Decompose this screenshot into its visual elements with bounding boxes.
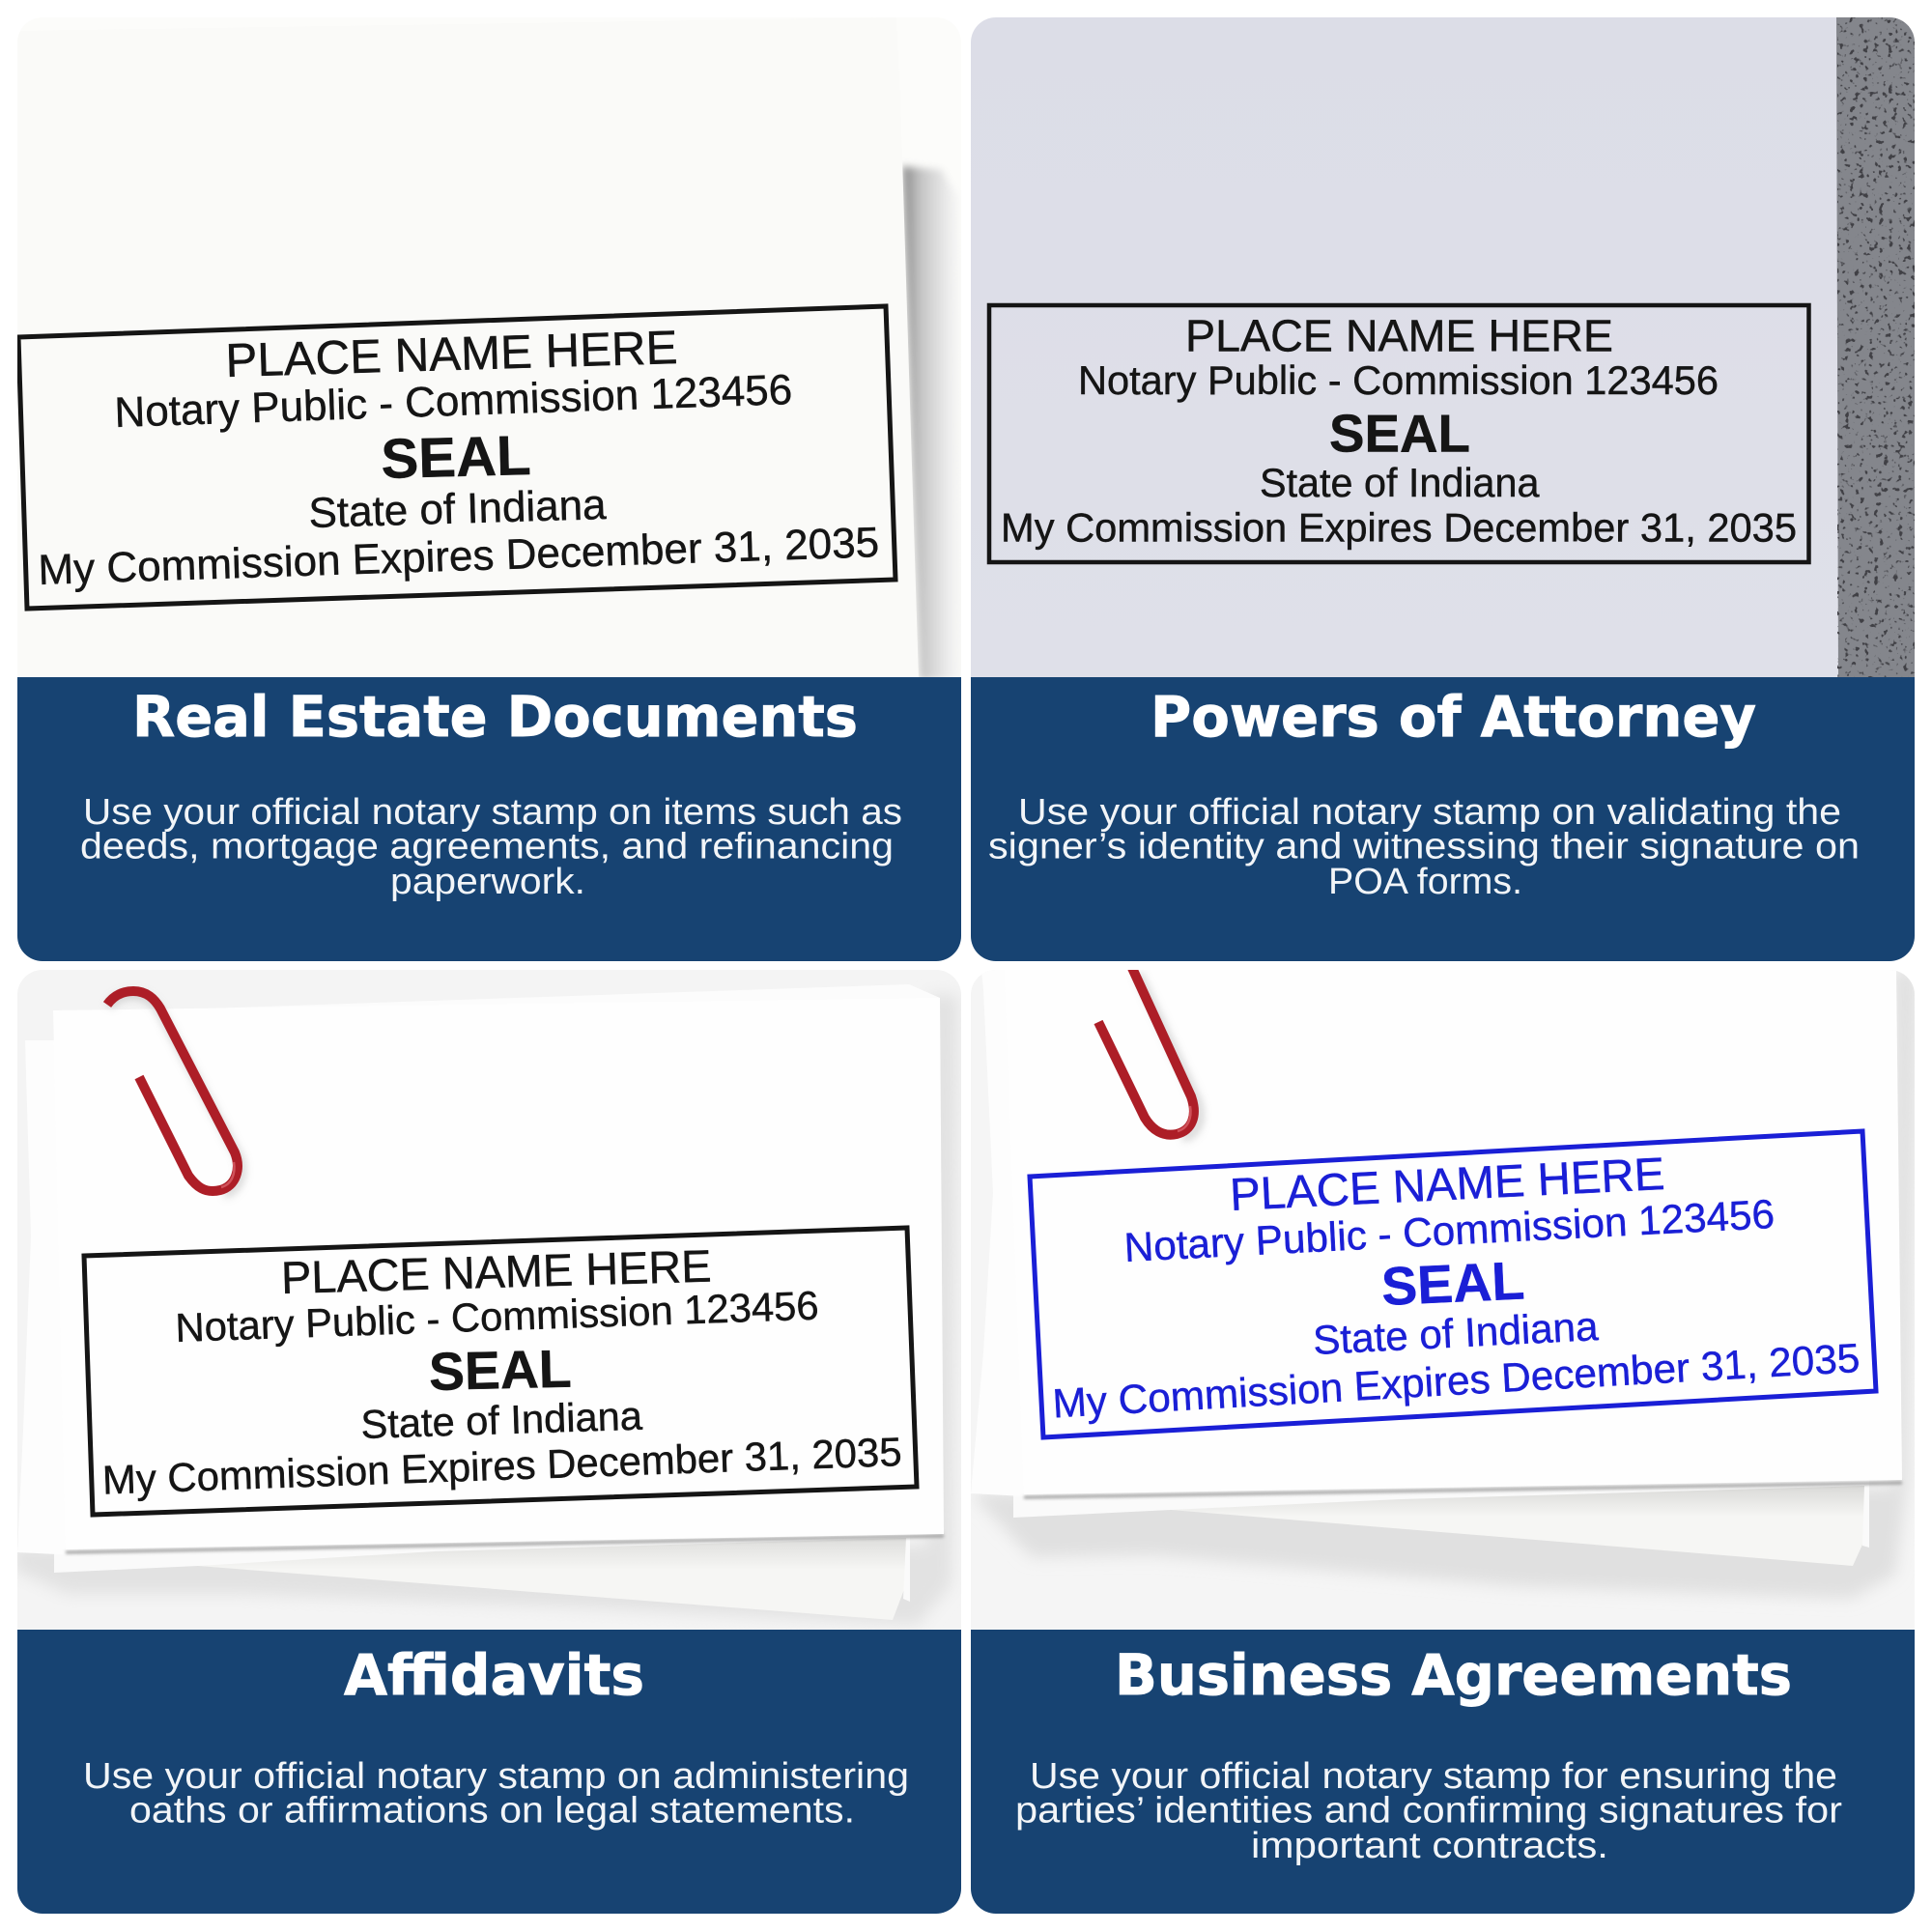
stamp impression: black, straight: My Commission Expires December 31, 2035 [1001, 505, 1797, 551]
panel: real estate documents [17, 160, 961, 961]
stamp impression: black, tilted: My Commission Expires December 31, 2035 [101, 1429, 902, 1503]
description [1015, 1756, 1842, 1866]
stamp impression: black, tilted: Notary Public - Commission 123456 [175, 1283, 819, 1350]
panel: business agreements [971, 968, 1918, 1914]
stamp impression: black, tilted: PLACE NAME HERE [225, 322, 678, 387]
stamp impression: black, tilted: SEAL [428, 1339, 572, 1402]
caption band [971, 677, 1915, 961]
caption band [17, 1630, 961, 1914]
stamp impression: blue, tilted: My Commission Expires December 31, 2035 [1051, 1335, 1861, 1426]
stamp impression: blue, tilted: State of Indiana [1312, 1303, 1600, 1363]
stamp impression: black, straight: Notary Public - Commission 123456 [1078, 357, 1719, 403]
description: deeds, mortgage agreements, and refinancing [80, 827, 894, 867]
stamp impression: black, straight: PLACE NAME HERE [1185, 311, 1613, 361]
description: POA forms. [1328, 862, 1522, 902]
description: oaths or affirmations on legal statements. [129, 1791, 855, 1832]
stamp impression: black, tilted: State of Indiana [360, 1393, 643, 1447]
caption band [971, 1630, 1915, 1914]
stamp impression: blue, tilted [1030, 1131, 1876, 1437]
photo: stacked paper sheets [14, 970, 961, 1636]
panel: affidavits [14, 970, 961, 1914]
stamp impression: black, tilted [18, 306, 895, 609]
stamp impression: black, tilted: My Commission Expires December 31, 2035 [38, 519, 880, 594]
description: Use your official notary stamp on items such as [83, 792, 902, 833]
description [989, 798, 1857, 895]
stamp impression: blue, tilted: SEAL [1380, 1250, 1525, 1317]
description: Use your official notary stamp for ensuring the [1030, 1756, 1837, 1797]
stamp impression: black, tilted: SEAL [381, 424, 531, 491]
panel: powers of attorney [971, 17, 1915, 961]
stamp impression: blue, tilted: Notary Public - Commission 123456 [1123, 1191, 1776, 1270]
stamp impression: black, straight: State of Indiana [1260, 461, 1540, 505]
description: Use your official notary stamp on administering [83, 1756, 909, 1797]
heading: Powers of Attorney [1151, 684, 1756, 750]
photo: stacked paper sheets [971, 970, 1918, 1636]
description: Use your official notary stamp on validating the [1018, 792, 1841, 833]
description: paperwork. [390, 862, 585, 902]
caption band [17, 677, 961, 961]
stamp impression: black, straight: SEAL [1329, 404, 1470, 464]
stamp impression: blue, tilted: PLACE NAME HERE [1229, 1149, 1665, 1221]
stamp impression: black, tilted: Notary Public - Commission 123456 [114, 366, 793, 437]
description: signer’s identity and witnessing their signature on [988, 827, 1860, 867]
description: important contracts. [1251, 1826, 1608, 1866]
stamp impression: black, tilted: PLACE NAME HERE [280, 1240, 712, 1303]
stamp impression: black, tilted: State of Indiana [308, 481, 608, 537]
description [80, 792, 902, 902]
photo: stamped paper sheet [902, 160, 961, 677]
stamp impression: black, straight [989, 305, 1808, 562]
photo: lavender paper on grey stone [971, 17, 1915, 684]
heading: Real Estate Documents [132, 684, 858, 750]
description: parties’ identities and confirming signatures for [1015, 1791, 1842, 1832]
description [83, 1756, 909, 1832]
heading: Affidavits [344, 1642, 644, 1708]
icon: red paperclip [107, 991, 242, 1194]
stamp impression: black, tilted [84, 1228, 917, 1515]
heading: Business Agreements [1115, 1642, 1792, 1708]
icon: red paperclip [1098, 968, 1200, 1138]
